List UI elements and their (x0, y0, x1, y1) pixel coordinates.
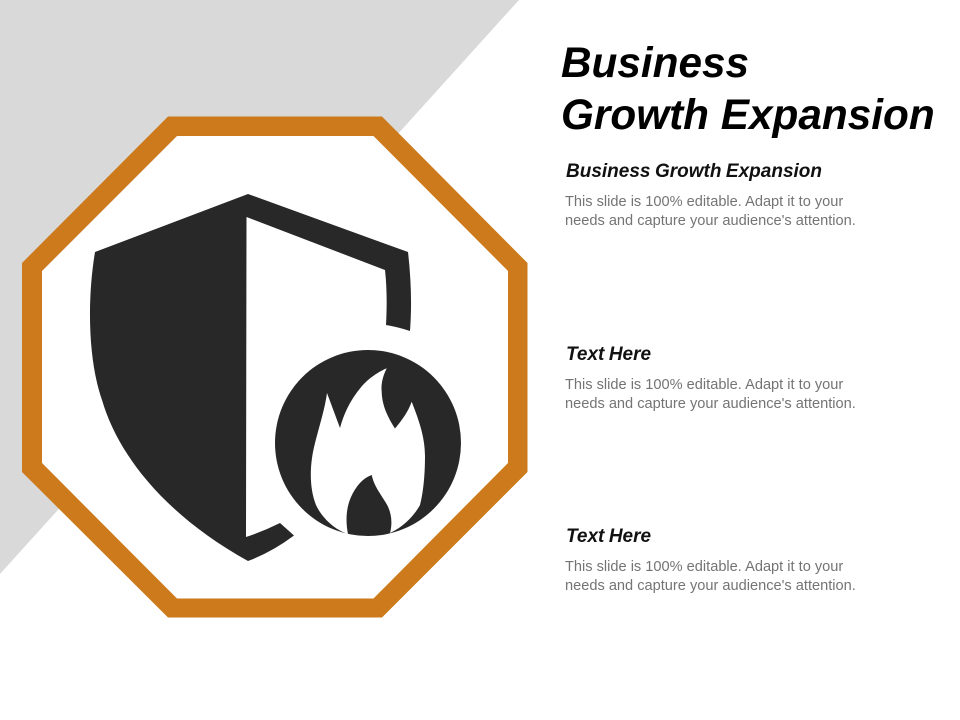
text block 3 (565, 559, 856, 594)
heading: text here 2: Text Here (566, 526, 651, 547)
orange octagon frame (22, 116, 528, 618)
title: Growth Expansion (561, 91, 935, 138)
flame white (311, 368, 425, 534)
grey diagonal background shape (0, 0, 519, 574)
text block 1 (565, 194, 856, 229)
white octagon interior (42, 136, 508, 598)
flame circle (275, 350, 461, 536)
heading: text here 1: Text Here (566, 344, 651, 365)
heading: business growth expansion: Business Growth Expansion (566, 161, 822, 182)
title (561, 39, 935, 138)
text block 1: This slide is 100% editable. Adapt it to your (565, 194, 843, 210)
title: Business (561, 39, 749, 86)
text block 2 (565, 377, 856, 412)
text block 3: This slide is 100% editable. Adapt it to your (565, 559, 843, 575)
text block 2: This slide is 100% editable. Adapt it to your (565, 377, 843, 393)
text block 1: needs and capture your audience's attention. (565, 213, 856, 229)
icon: shield with flame (90, 194, 461, 561)
text block 3: needs and capture your audience's attention. (565, 578, 856, 594)
text block 2: needs and capture your audience's attention. (565, 396, 856, 412)
shield left half and outline (90, 194, 411, 561)
